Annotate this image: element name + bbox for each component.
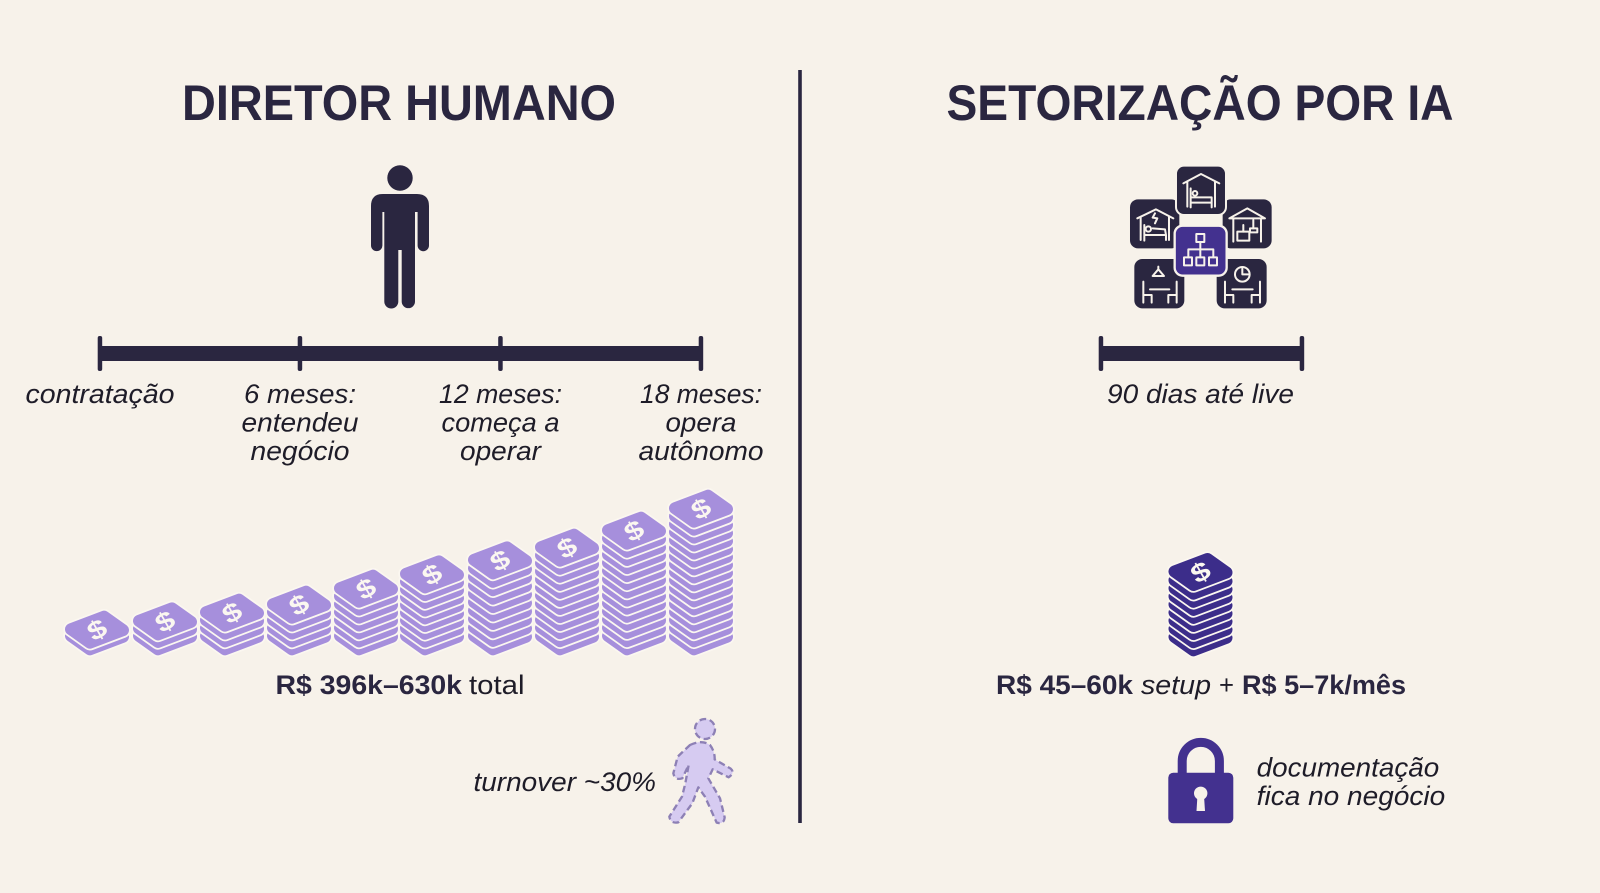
- icon: bottom-right sector tile: [1217, 259, 1267, 308]
- icon: padlock: [1168, 742, 1233, 823]
- label: 18 meses: autônomo: [638, 436, 764, 466]
- label: 6 meses: [242, 379, 358, 466]
- panel: setorização por IA: [946, 75, 1454, 823]
- label: 12 meses: operar: [460, 436, 542, 466]
- cost: setup plus monthly: +: [1219, 670, 1234, 700]
- icon: left sector tile: [1130, 199, 1179, 248]
- chart: growing money stacks: $: [82, 613, 112, 647]
- label: 18 meses: opera: [666, 408, 736, 438]
- label: 12 meses: 12 meses:: [439, 379, 562, 409]
- icon: right sector tile: [1223, 199, 1272, 248]
- chart: growing money stacks: $: [485, 544, 515, 578]
- chart: growing money stacks: $: [217, 596, 247, 630]
- timeline: 18 months: [98, 336, 703, 371]
- chart: growing money stacks: $: [417, 558, 447, 592]
- panel: diretor humano: [26, 75, 764, 823]
- cost: setup plus monthly: setup: [1141, 670, 1211, 700]
- label: 6 meses: entendeu: [242, 408, 358, 438]
- timeline: 90 days: [1099, 336, 1304, 371]
- label: turnover: turnover ~30%: [474, 767, 656, 797]
- center divider: [798, 70, 802, 823]
- cost: setup plus monthly: R$ 5–7k/mês: [1242, 670, 1406, 700]
- label: 12 meses: começa a: [442, 408, 560, 438]
- label: documentação: fica no negócio: [1257, 781, 1445, 811]
- icon: walking person dashed: [669, 719, 733, 823]
- cost: setup plus monthly: R$ 45–60k: [996, 670, 1134, 700]
- chart: growing money stacks: $: [284, 588, 314, 622]
- label: 18 meses: [638, 379, 764, 466]
- heading: setorização por IA: SETORIZAÇÃO POR IA: [946, 75, 1454, 131]
- label: documentação: [1257, 753, 1445, 811]
- label: contratação: contratação: [26, 379, 174, 409]
- chart: growing money stacks: $: [351, 572, 381, 606]
- chart: growing money stacks: $: [686, 492, 716, 526]
- icon: top sector tile: [1176, 166, 1226, 215]
- icon: bottom-left sector tile: [1134, 259, 1184, 308]
- chart: growing money stacks: $: [619, 514, 649, 548]
- icon: sector cluster: [1130, 166, 1272, 308]
- cost total: total: [469, 670, 524, 700]
- icon: central hub tile: [1175, 226, 1227, 276]
- cost total: R$ 396k–630k: [276, 670, 463, 700]
- icon: person: [371, 165, 429, 308]
- chart: growing money stacks: $: [150, 605, 180, 639]
- label: documentação: documentação: [1257, 753, 1439, 783]
- label: 6 meses: negócio: [250, 436, 350, 466]
- heading: diretor humano: DIRETOR HUMANO: [182, 75, 616, 131]
- icon: small money stack: $: [1186, 555, 1216, 590]
- chart: growing money stacks: $: [552, 531, 582, 565]
- label: 90 dias: 90 dias até live: [1107, 379, 1294, 409]
- label: 6 meses: 6 meses:: [244, 379, 356, 409]
- label: 12 meses: [439, 379, 562, 466]
- cost: setup plus monthly: [996, 670, 1406, 700]
- chart: growing money stacks: [71, 492, 727, 649]
- label: 18 meses: 18 meses:: [640, 379, 762, 409]
- icon: small money stack: [1174, 555, 1226, 650]
